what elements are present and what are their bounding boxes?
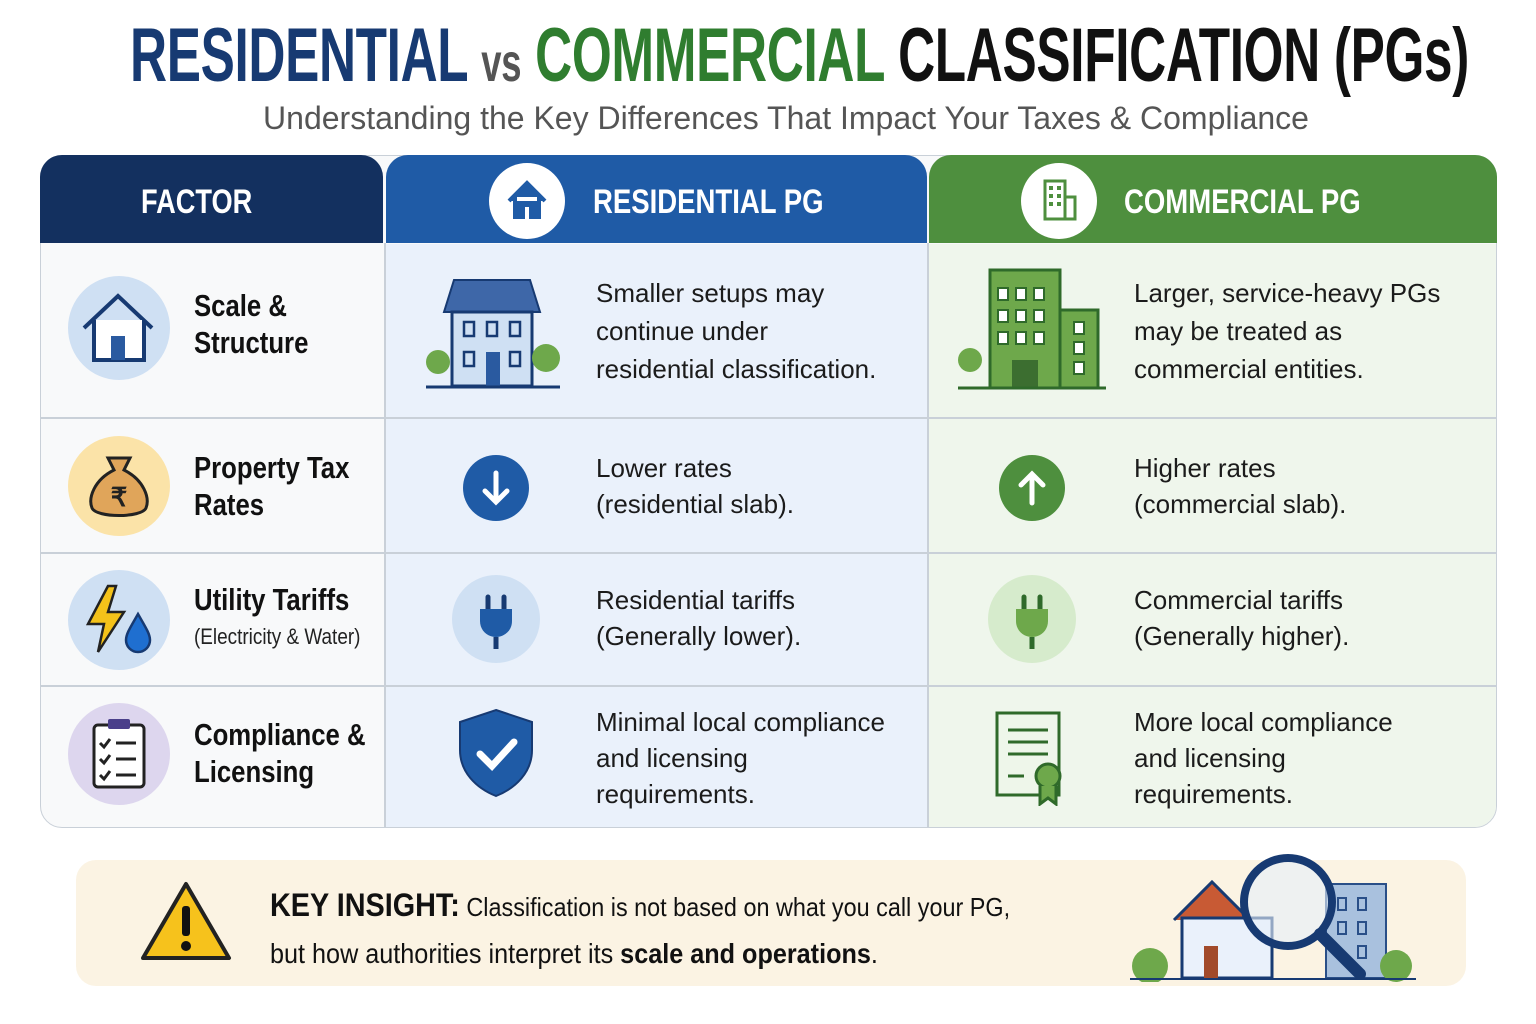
text: commercial tariffs: (Generally higher). — [1134, 621, 1349, 651]
commercial building — [958, 268, 1106, 390]
row 1: scale — [68, 276, 308, 380]
text: residential scale: residential classification. — [596, 354, 876, 384]
icon: house circle — [68, 276, 170, 380]
text: more compliance: and licensing — [1134, 743, 1286, 773]
row 1: scale: Scale & — [194, 288, 287, 323]
icon: shield — [459, 709, 533, 798]
table — [40, 155, 1497, 828]
header: residential — [386, 155, 927, 243]
text: more compliance: requirements. — [1134, 779, 1293, 809]
row 1: scale: Structure — [194, 325, 308, 360]
text: higher rates — [1134, 453, 1346, 519]
text: higher rates: Higher rates — [1134, 453, 1276, 483]
text: minimal compliance: and licensing — [596, 743, 748, 773]
icon: building — [1021, 163, 1097, 239]
text: key insight: KEY INSIGHT: Classification is not based on what you call your PG, — [270, 887, 1010, 923]
icon: house — [489, 163, 565, 239]
icon: certificate — [996, 712, 1062, 806]
text: key insight — [270, 887, 1010, 969]
icon: up arrow — [999, 455, 1065, 521]
illustration: house, building, magnifier — [1130, 854, 1416, 982]
row 3: utility: Utility Tariffs — [194, 582, 349, 617]
header: factor — [40, 155, 383, 243]
icon: plug commercial — [988, 575, 1076, 663]
text: commercial scale: Larger, service-heavy PGs — [1134, 278, 1440, 308]
text: commercial scale: may be treated as — [1134, 316, 1342, 346]
text: minimal compliance: Minimal local compliance — [596, 707, 885, 737]
icon: warning — [141, 882, 232, 960]
text: minimal compliance: requirements. — [596, 779, 755, 809]
text: key insight: but how authorities interpret its scale and operations. — [270, 938, 878, 969]
header: residential: RESIDENTIAL PG — [593, 183, 824, 221]
text: commercial tariffs: Commercial tariffs — [1134, 585, 1343, 615]
text: residential scale: continue under — [596, 316, 768, 346]
subtitle: Understanding the Key Differences That Impact Your Taxes & Compliance — [263, 100, 1309, 136]
icon: bolt and drop — [68, 570, 170, 670]
row 4: compliance — [68, 703, 366, 805]
row 2: property tax — [68, 436, 350, 536]
text: residential tariffs: Residential tariffs — [596, 585, 795, 615]
row 2: property tax: Rates — [194, 487, 264, 522]
text: more compliance: More local compliance — [1134, 707, 1393, 737]
row 4: compliance: Licensing — [194, 754, 314, 789]
icon: plug residential — [452, 575, 540, 663]
text: minimal compliance — [596, 707, 885, 809]
text: residential tariffs: (Generally lower). — [596, 621, 801, 651]
row 3: utility: (Electricity & Water) — [194, 624, 360, 649]
text: commercial scale — [1134, 278, 1440, 384]
text: more compliance — [1134, 707, 1393, 809]
header: factor: FACTOR — [141, 183, 252, 221]
text: lower rates: Lower rates — [596, 453, 732, 483]
text: residential scale: Smaller setups may — [596, 278, 824, 308]
text: commercial tariffs — [1134, 585, 1349, 651]
icon: down arrow — [463, 455, 529, 521]
text: lower rates: (residential slab). — [596, 489, 794, 519]
text: higher rates: (commercial slab). — [1134, 489, 1346, 519]
residential building — [426, 279, 560, 388]
text: lower rates — [596, 453, 794, 519]
header: commercial: COMMERCIAL PG — [1124, 183, 1361, 221]
key insight callout — [76, 860, 1466, 986]
text: commercial scale: commercial entities. — [1134, 354, 1364, 384]
row 3: utility — [68, 570, 360, 670]
row dividers — [40, 417, 1497, 418]
text: residential scale — [596, 278, 876, 384]
icon: money bag: ₹ — [111, 482, 127, 512]
text: residential tariffs — [596, 585, 801, 651]
header: commercial — [929, 155, 1497, 243]
title: RESIDENTIAL vs COMMERCIAL CLASSIFICATION (PGs) — [130, 13, 1469, 98]
row 2: property tax: Property Tax — [194, 450, 349, 485]
icon: money bag — [68, 436, 170, 536]
row 4: compliance: Compliance & — [194, 717, 366, 752]
icon: clipboard — [68, 703, 170, 805]
